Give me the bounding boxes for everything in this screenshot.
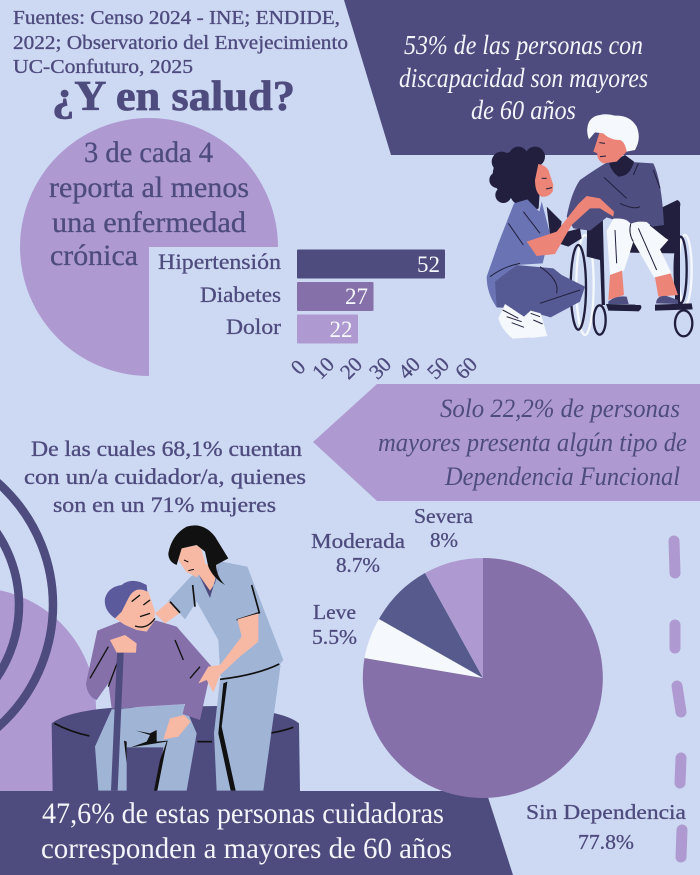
slice: severa bbox=[425, 558, 483, 678]
face bbox=[535, 164, 553, 197]
sweater folds bbox=[604, 163, 660, 208]
illustration: caregiver with older man on a seat bbox=[52, 525, 300, 792]
face details bbox=[542, 178, 552, 189]
bar labels bbox=[158, 249, 282, 339]
shoelaces bbox=[503, 310, 543, 327]
face details bbox=[184, 560, 194, 571]
facial features bbox=[132, 595, 155, 627]
bottom banner text bbox=[41, 797, 452, 865]
wheelchair frame bbox=[587, 200, 693, 311]
bar values bbox=[330, 252, 440, 342]
pie labels: 5.5% bbox=[312, 625, 357, 649]
trousers bbox=[95, 704, 197, 791]
pie labels: 8.7% bbox=[336, 553, 380, 577]
banner text bbox=[399, 30, 648, 125]
caregiver text bbox=[24, 436, 306, 517]
older man bbox=[86, 581, 212, 791]
collar bbox=[199, 563, 220, 598]
bar values: 22 bbox=[330, 317, 352, 342]
neck bbox=[609, 155, 634, 177]
chronic disease text: 3 de cada 4 bbox=[84, 136, 213, 169]
hand on cane bbox=[110, 635, 137, 653]
banner text: de 60 años bbox=[471, 95, 576, 125]
bar values: 52 bbox=[417, 252, 440, 277]
chronic disease text: reporta al menos bbox=[49, 171, 249, 204]
caregiver text: son en un 71% mujeres bbox=[53, 492, 276, 517]
axis tick labels: 20 bbox=[335, 352, 367, 384]
decorative concentric rings bbox=[0, 442, 53, 768]
banner text: 53% de las personas con bbox=[404, 30, 643, 60]
forearm bbox=[198, 613, 258, 693]
bar labels: Dolor bbox=[226, 314, 282, 339]
wheelchair rear wheels bbox=[571, 235, 692, 335]
bottom banner text: 47,6% de estas personas cuidadoras bbox=[42, 797, 444, 830]
pie labels: Sin Dependencia bbox=[526, 800, 687, 824]
far sleeve bbox=[547, 207, 582, 247]
pie labels bbox=[311, 504, 687, 854]
lower legs bbox=[608, 271, 678, 300]
bottom banner text: corresponden a mayores de 60 años bbox=[41, 832, 452, 865]
panel: three quarter circle with chronic disease text bbox=[20, 118, 278, 376]
pie chart: functional dependency bbox=[363, 558, 603, 798]
shoes bbox=[608, 296, 678, 304]
source note: UC-Confuturo, 2025 bbox=[13, 56, 193, 78]
slice: sin dependencia bbox=[363, 558, 603, 798]
face bbox=[593, 131, 628, 163]
arrow text: mayores presenta algún tipo de bbox=[378, 428, 687, 457]
sweater bbox=[567, 161, 664, 231]
pie labels: Leve bbox=[313, 600, 356, 624]
chronic disease text bbox=[49, 136, 249, 272]
axis tick labels: 30 bbox=[364, 352, 396, 384]
sweater bbox=[86, 621, 212, 720]
scrub top bbox=[487, 199, 550, 307]
face bbox=[178, 545, 206, 577]
axis tick labels bbox=[286, 352, 482, 384]
seat bbox=[52, 706, 300, 792]
bar labels: Hipertensión bbox=[158, 249, 281, 274]
cane bbox=[111, 647, 124, 791]
scrub top bbox=[168, 561, 283, 680]
panel: bottom banner bbox=[0, 791, 513, 875]
decorative dashed line, right bbox=[674, 541, 682, 857]
source note bbox=[13, 7, 348, 78]
panel: dependency arrow bbox=[313, 384, 700, 501]
chronic disease text: una enfermedad bbox=[52, 206, 246, 239]
shoes bbox=[498, 304, 547, 339]
banner text: discapacidad son mayores bbox=[399, 63, 648, 93]
pie labels: Severa bbox=[414, 504, 474, 528]
seat lines bbox=[54, 723, 293, 742]
source note: 2022; Observatorio del Envejecimiento bbox=[13, 32, 348, 54]
pie labels: 8% bbox=[430, 528, 458, 552]
title: ¿Y en salud? bbox=[52, 74, 295, 120]
pants bbox=[493, 265, 585, 317]
axis tick labels: 0 bbox=[286, 355, 310, 379]
axis tick labels: 40 bbox=[393, 352, 425, 384]
bar values: 27 bbox=[345, 284, 368, 309]
hand on knee bbox=[163, 715, 191, 739]
axis tick labels: 50 bbox=[422, 352, 454, 384]
arrow text: Solo 22,2% de personas bbox=[440, 394, 680, 423]
arm bbox=[527, 196, 614, 256]
arrow text bbox=[378, 394, 687, 491]
illustration: nurse with woman in wheelchair bbox=[487, 114, 693, 339]
trouser creases bbox=[124, 730, 168, 791]
trouser folds bbox=[615, 224, 667, 270]
chronic disease text: crónica bbox=[50, 239, 138, 272]
neck bbox=[199, 562, 217, 594]
trousers bbox=[607, 218, 672, 277]
curly hair bbox=[489, 147, 545, 213]
face lines bbox=[599, 143, 606, 157]
axis tick labels: 10 bbox=[307, 352, 339, 384]
hair bbox=[105, 581, 147, 618]
decorative lavender circle, bottom left bbox=[0, 588, 96, 828]
top shadows bbox=[170, 585, 279, 679]
bars bbox=[297, 250, 445, 344]
slice: leve bbox=[364, 619, 483, 678]
bar chart: chronic conditions bbox=[158, 249, 482, 384]
hair bbox=[587, 114, 639, 152]
arm on shoulder bbox=[155, 601, 181, 623]
caregiver text: De las cuales 68,1% cuentan bbox=[31, 436, 302, 461]
pie labels: Moderada bbox=[311, 529, 406, 553]
wheelchair casters bbox=[594, 305, 692, 336]
panel: top right banner bbox=[344, 0, 700, 155]
nurse bbox=[487, 147, 614, 339]
arrow text: Dependencia Funcional bbox=[444, 462, 680, 491]
bar labels: Diabetes bbox=[200, 282, 281, 307]
sweater folds bbox=[90, 640, 200, 687]
clothing lines bbox=[490, 212, 580, 303]
source note: Fuentes: Censo 2024 - INE; ENDIDE, bbox=[13, 7, 340, 29]
caregiver bbox=[155, 525, 283, 791]
caregiver text: con un/a cuidador/a, quienes bbox=[24, 464, 306, 489]
elderly woman bbox=[567, 114, 678, 304]
axis tick labels: 60 bbox=[450, 352, 482, 384]
hair bbox=[168, 525, 228, 585]
head bbox=[115, 588, 155, 632]
pants shadow bbox=[218, 682, 236, 791]
pants bbox=[214, 665, 281, 791]
pie labels: 77.8% bbox=[578, 830, 634, 854]
slice: moderada bbox=[379, 573, 483, 678]
